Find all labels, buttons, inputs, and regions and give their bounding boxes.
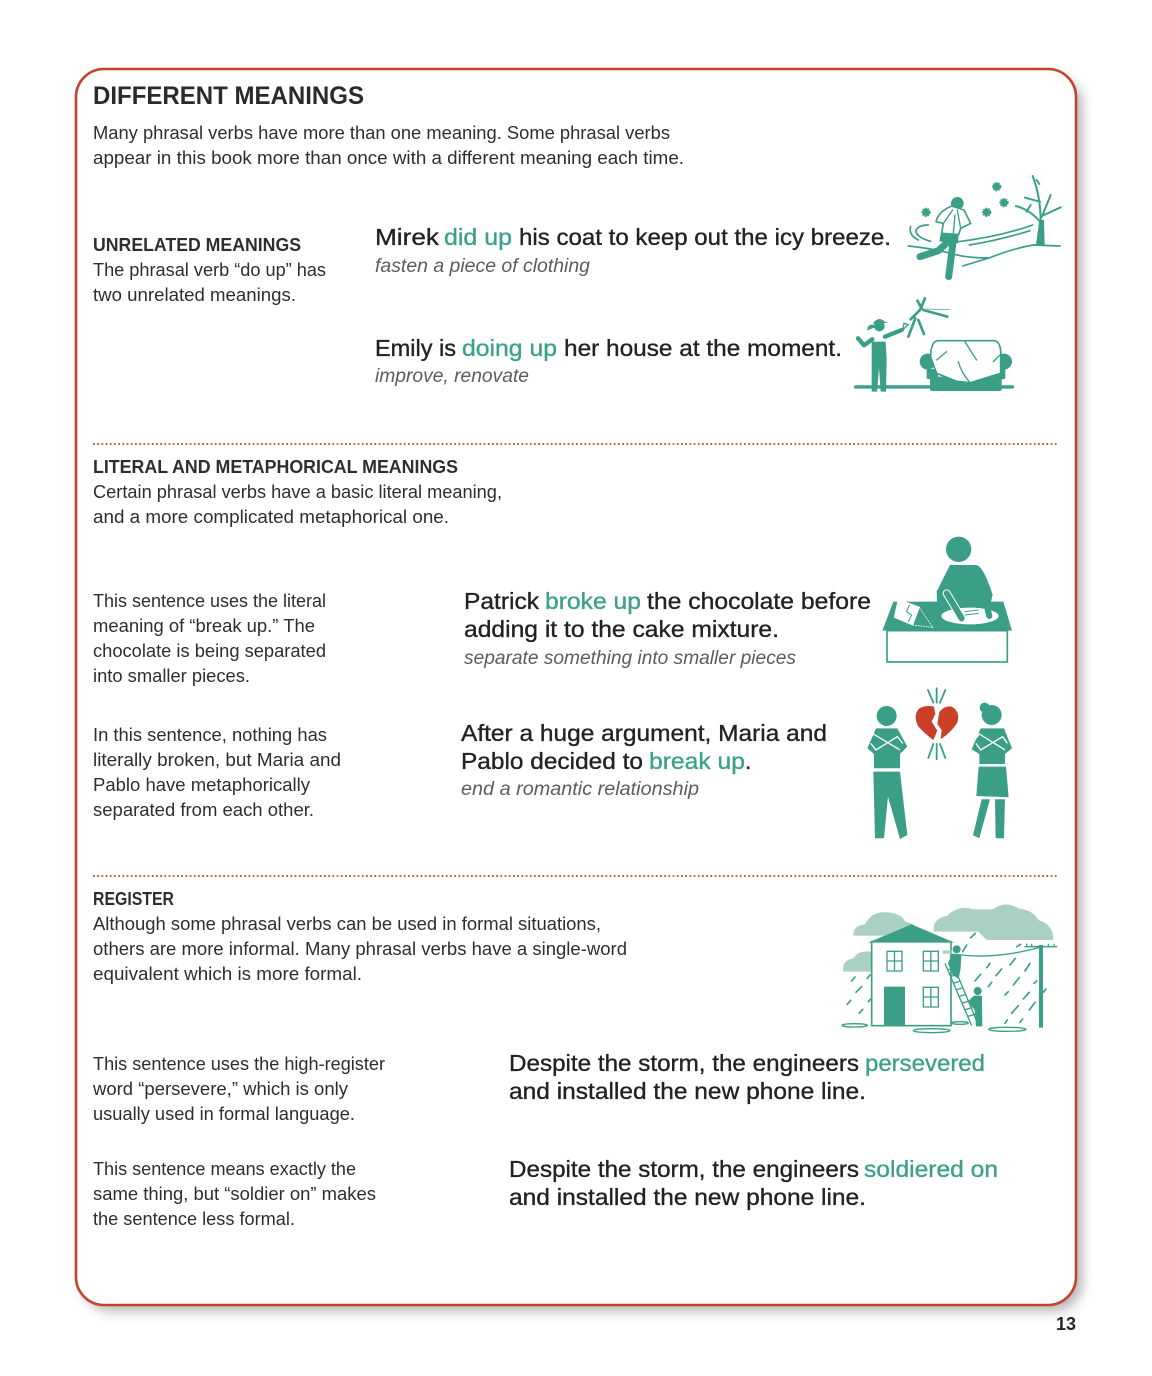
example: broke up: Patrick (464, 588, 540, 614)
example: doing up (375, 335, 842, 387)
section: register explanation: equivalent which is more formal. (93, 963, 362, 984)
page number: 13 (1056, 1313, 1076, 1334)
section: literal and metaphorical meanings explanation: Certain phrasal verbs have a basic literal meaning, (93, 481, 502, 502)
note: less formal: the sentence less formal. (93, 1208, 295, 1229)
example: break up: end a romantic relationship (461, 778, 699, 800)
note: high register: word “persevere,” which is only (92, 1078, 349, 1099)
example: persevered: and installed the new phone line. (509, 1078, 866, 1104)
icon: engineers repairing phone line in the storm (842, 904, 1057, 1033)
note: literal meaning: This sentence uses the literal (93, 590, 326, 611)
note: high register: usually used in formal language. (93, 1103, 355, 1124)
icon: man in icy breeze (908, 176, 1061, 277)
example: break up: Pablo decided to (461, 748, 643, 774)
example: break up (461, 720, 827, 800)
example: did up: did up (444, 224, 512, 250)
note: literal meaning: into smaller pieces. (93, 665, 250, 686)
example: persevered: persevered (865, 1050, 985, 1076)
note: metaphorical meaning: In this sentence, nothing has (93, 724, 327, 745)
section: register explanation: Although some phrasal verbs can be used in formal situations, (93, 913, 601, 934)
example: break up: . (745, 748, 751, 774)
section: unrelated meanings explanation: The phrasal verb “do up” has (93, 259, 326, 280)
icon: couple with broken heart (867, 688, 1012, 839)
text block: introduction (93, 122, 684, 168)
note: high register: This sentence uses the high-register (93, 1053, 385, 1074)
example: broke up (464, 588, 871, 669)
note: metaphorical meaning: Pablo have metaphorically (93, 774, 311, 795)
example: broke up: the chocolate before (647, 588, 871, 614)
note: high register (92, 1053, 385, 1124)
title: DIFFERENT MEANINGS (93, 82, 364, 110)
section: unrelated meanings explanation: UNRELATED MEANINGS (93, 235, 301, 255)
note: metaphorical meaning: separated from each other. (93, 799, 314, 820)
section: register explanation: REGISTER (93, 889, 174, 909)
example: soldiered on: Despite the storm, the engineers (509, 1156, 859, 1182)
example: soldiered on (509, 1156, 998, 1210)
example: doing up: Emily is (375, 335, 456, 361)
text block: introduction: Many phrasal verbs have more than one meaning. Some phrasal verbs (93, 122, 670, 143)
icon: person breaking chocolate (882, 537, 1012, 662)
example: persevered (509, 1050, 985, 1104)
example: broke up: broke up (545, 588, 641, 614)
section: literal and metaphorical meanings explanation: and a more complicated metaphorical one. (93, 506, 449, 527)
note: literal meaning: chocolate is being separated (93, 640, 326, 661)
section: literal and metaphorical meanings explanation (93, 444, 1058, 527)
section: unrelated meanings explanation (93, 235, 326, 305)
example: did up: his coat to keep out the icy breeze. (519, 224, 891, 250)
example: broke up: separate something into smaller pieces (464, 647, 796, 669)
note: less formal: same thing, but “soldier on” makes (93, 1183, 376, 1204)
section: unrelated meanings explanation: two unrelated meanings. (93, 284, 296, 305)
example: soldiered on: and installed the new phone line. (509, 1184, 866, 1210)
note: literal meaning: meaning of “break up.” The (93, 615, 315, 636)
text block: introduction: appear in this book more than once with a different meaning each time. (93, 147, 684, 168)
example: break up: After a huge argument, Maria and (461, 720, 827, 746)
section: register explanation: others are more informal. Many phrasal verbs have a single-word (93, 938, 627, 959)
example: did up (375, 224, 891, 277)
example: persevered: Despite the storm, the engineers (509, 1050, 859, 1076)
note: literal meaning (93, 590, 326, 686)
example: break up: break up (649, 748, 745, 774)
panel: different meanings (76, 69, 1082, 1311)
section: register explanation (93, 876, 1058, 984)
example: doing up: improve, renovate (375, 365, 529, 387)
note: less formal: This sentence means exactly the (93, 1158, 356, 1179)
example: did up: fasten a piece of clothing (375, 255, 590, 277)
section: literal and metaphorical meanings explanation: LITERAL AND METAPHORICAL MEANINGS (93, 457, 458, 477)
example: did up: Mirek (375, 224, 440, 250)
example: broke up: adding it to the cake mixture. (464, 616, 779, 642)
example: soldiered on: soldiered on (864, 1156, 998, 1182)
note: metaphorical meaning (93, 724, 341, 820)
note: metaphorical meaning: literally broken, but Maria and (93, 749, 341, 770)
icon: woman renovating sofa (856, 298, 1012, 392)
example: doing up: her house at the moment. (564, 335, 842, 361)
example: doing up: doing up (462, 335, 557, 361)
note: less formal (93, 1158, 376, 1229)
